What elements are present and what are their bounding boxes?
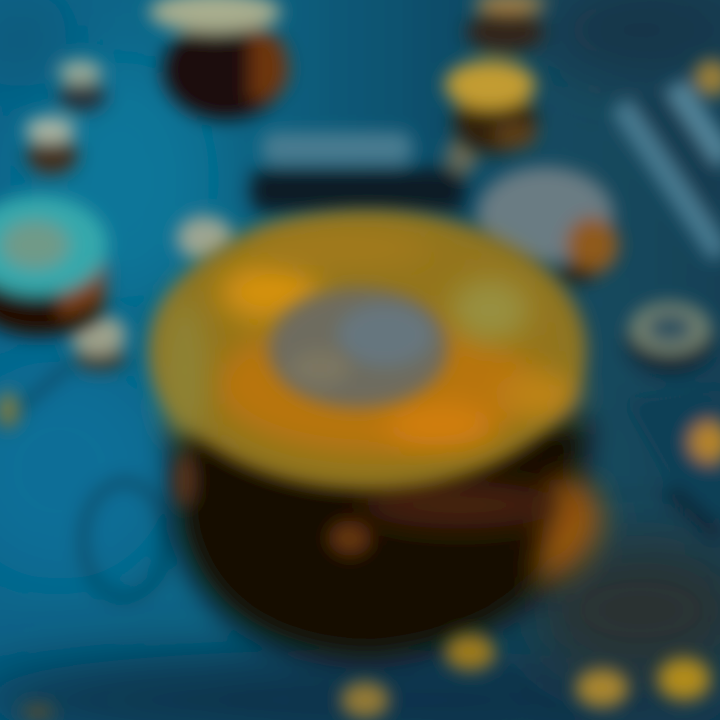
gold dots: bottom	[22, 634, 710, 719]
chip: right lower	[625, 390, 720, 535]
small studs: left column	[0, 60, 233, 428]
coin: right silver and copper	[477, 167, 618, 282]
chip: upper right ridges	[610, 60, 720, 270]
main coin: gold face	[150, 210, 586, 490]
coin: top centre copper	[149, 0, 288, 120]
main coin: grey centre emblem	[268, 288, 448, 408]
circuit traces: lower left	[0, 365, 167, 598]
coins: top right gold stack	[445, 0, 546, 154]
coin: right small ring	[626, 302, 714, 374]
main coin: dark body	[172, 420, 602, 660]
dark block: top centre	[250, 132, 478, 213]
coin: left teal	[0, 195, 108, 336]
